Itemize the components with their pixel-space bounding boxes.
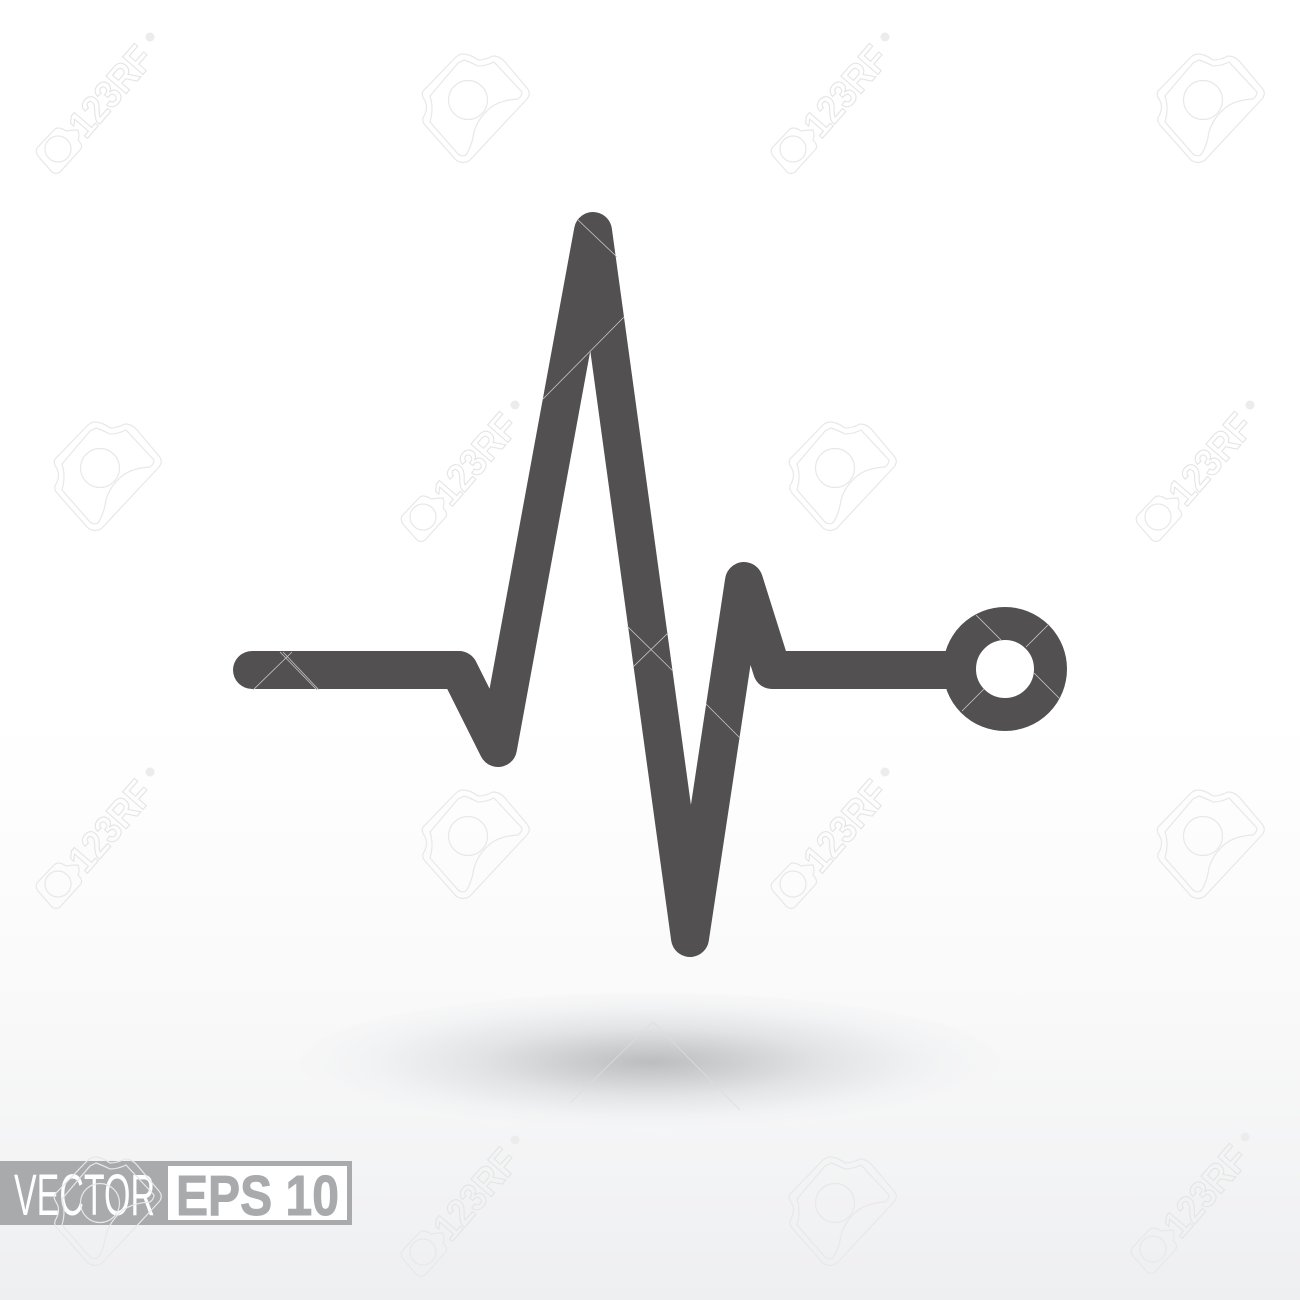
- badge: VECTOR EPS 10: EPS 10: [176, 1164, 339, 1228]
- badge: VECTOR EPS 10: [0, 1161, 352, 1228]
- watermark: 123RF diagonal text marks: 123RF: [1155, 1138, 1257, 1246]
- watermark: 123RF diagonal text marks: 123RF: [795, 38, 897, 146]
- watermark: 123RF diagonal text marks: 123RF: [1160, 406, 1262, 514]
- badge: VECTOR EPS 10: VECTOR: [14, 1163, 155, 1228]
- drop shadow beneath icon: [300, 993, 1000, 1131]
- watermark: 123RF diagonal text marks: 123RF: [60, 773, 162, 881]
- watermark: hairlines crossing the icon and shadow: [253, 219, 1060, 1110]
- watermark: 123RF diagonal text marks: 123RF: [425, 1141, 527, 1249]
- icon: heartbeat pulse line with ring terminal: [252, 231, 1050, 938]
- watermark: 123RF diagonal text marks: 123RF: [795, 773, 897, 881]
- watermark: 123RF diagonal text marks: 123RF: [425, 406, 527, 514]
- watermark: 123RF diagonal text marks: 123RF: [60, 38, 162, 146]
